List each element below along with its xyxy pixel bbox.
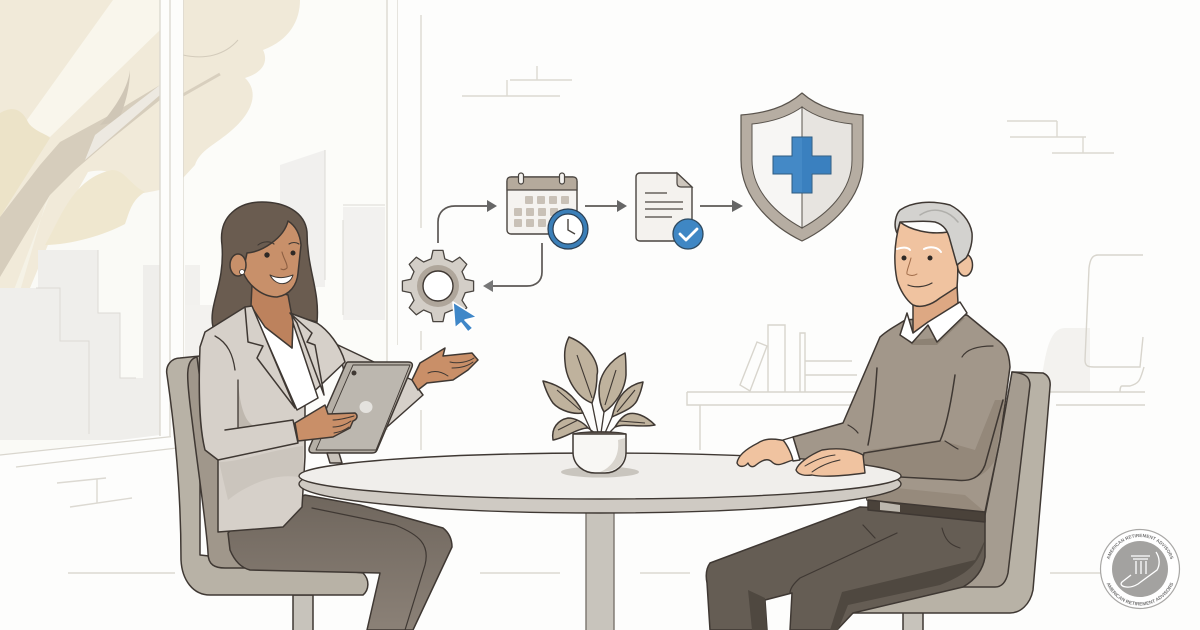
man neck and head [895,202,972,333]
flow arrows [438,200,743,292]
foliage lower cloud [45,170,145,245]
window: left pane with tree and skyline [0,0,160,460]
man shirt cuff [783,437,800,461]
woman holding hand [295,405,357,441]
table [299,453,901,630]
man figure [706,202,1010,630]
woman neck [251,285,293,348]
leaf cluster [543,337,655,440]
wall line sketches [57,15,1114,573]
icon: cursor [453,302,477,332]
right lapel [290,313,324,395]
pot [573,432,626,473]
man pants [706,507,985,630]
logo: American Retirement Advisors seal: AMERICAN RETIREMENT ADVISORS [1106,534,1174,560]
skyline [0,250,160,440]
man chair [853,372,1050,630]
logo: American Retirement Advisors seal [1100,528,1180,610]
man right hand [796,449,865,476]
woman right sleeve [338,345,423,427]
man sweater [793,315,1010,512]
man hands resting on table [737,437,865,476]
white light band [27,0,160,137]
window: right pane with tree and skyline [184,0,385,356]
icon: shield with cross [741,93,863,241]
man hair [895,202,972,265]
tablet stand glimpse [327,453,342,463]
icon: gear with cursor [402,250,477,332]
tablet [309,362,412,453]
woman blazer [199,307,345,532]
woman pants [228,495,452,630]
woman open hand [412,348,478,390]
window frame [0,0,397,467]
man belt [868,500,985,522]
woman hair [212,202,317,327]
white blouse [252,307,318,410]
trunk [0,85,160,277]
logo: American Retirement Advisors seal: AMERICAN RETIREMENT ADVISORS [1106,582,1174,606]
icon: calendar with clock [507,173,588,249]
plant in pot [543,337,655,478]
foliage upper [0,0,160,288]
blazer fold shading [219,446,303,500]
left lapel [245,306,295,408]
woman figure [199,202,478,630]
foliage left [0,109,50,217]
background desk with books and monitor [687,255,1145,450]
woman chair [167,356,368,630]
icon: clock [548,209,588,249]
woman left sleeve cuff [218,420,298,460]
icon: check badge [673,219,703,249]
man left hand [737,439,793,467]
man shirt collar [900,302,967,343]
icon: document with check [636,173,703,249]
woman face [230,221,301,297]
